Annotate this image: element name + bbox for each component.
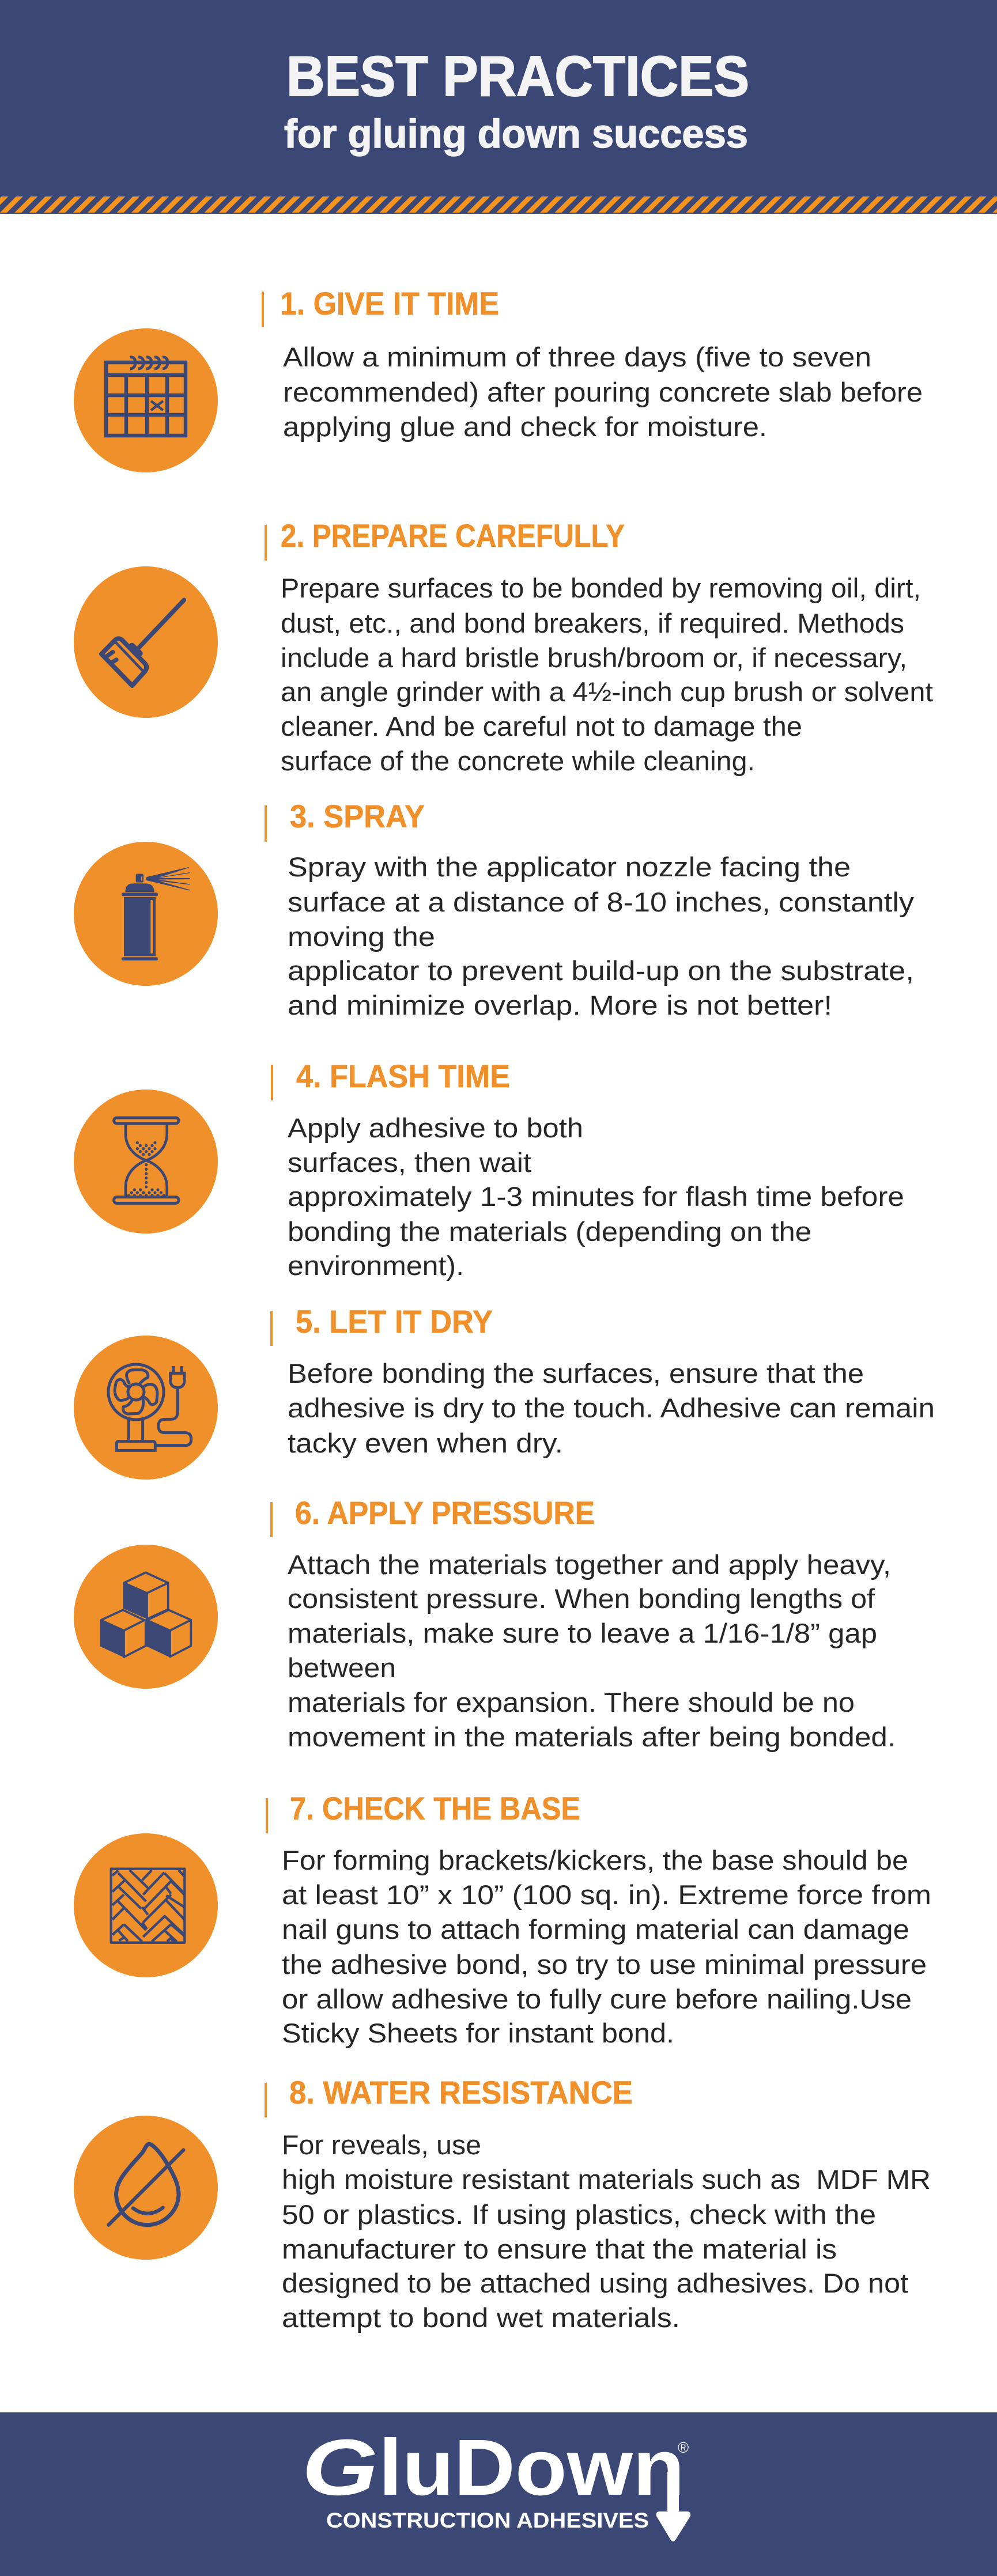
text block: recommended) after pouring concrete slab before <box>283 377 923 407</box>
footer banner <box>0 2412 997 2576</box>
text block: attempt to bond wet materials. <box>282 2302 680 2333</box>
heading: 1. GIVE IT TIME <box>280 285 499 321</box>
text block: the adhesive bond, so try to use minimal pressure <box>282 1949 927 1980</box>
heading: 8. WATER RESISTANCE <box>289 2074 633 2110</box>
icon: electric fan <box>74 1336 218 1480</box>
heading <box>265 798 425 842</box>
text block: surface of the concrete while cleaning. <box>281 746 755 776</box>
heading: 5. LET IT DRY <box>296 1303 493 1340</box>
text block: moving the <box>288 921 435 952</box>
panel: step 5 let it dry <box>74 1303 935 1480</box>
subtitle: for gluing down success <box>284 111 748 156</box>
text block: movement in the materials after being bonded. <box>288 1722 896 1752</box>
text block: manufacturer to ensure that the material is <box>282 2234 837 2264</box>
text block <box>281 573 933 776</box>
text block: For reveals, use <box>282 2129 481 2160</box>
text block: consistent pressure. When bonding lengths of <box>288 1583 875 1614</box>
text block <box>288 852 915 1020</box>
panel: step 3 spray <box>74 798 915 1020</box>
heading: 2. PREPARE CAREFULLY <box>281 517 625 554</box>
text block: applicator to prevent build-up on the substrate, <box>288 955 914 986</box>
title: BEST PRACTICES <box>286 44 749 108</box>
text block: cleaner. And be careful not to damage the <box>281 711 802 742</box>
text block: at least 10” x 10” (100 sq. in). Extreme force from <box>282 1879 931 1910</box>
text block: materials, make sure to leave a 1/16-1/8” gap <box>288 1618 877 1648</box>
text block: tacky even when dry. <box>288 1428 563 1458</box>
icon: brush <box>74 566 218 718</box>
text block: 50 or plastics. If using plastics, check with the <box>282 2199 876 2230</box>
text block: Allow a minimum of three days (five to seven <box>283 342 871 372</box>
text block <box>282 1845 931 2048</box>
text block: applying glue and check for moisture. <box>283 411 767 442</box>
text block: Prepare surfaces to be bonded by removing oil, dirt, <box>281 573 921 603</box>
text block: or allow adhesive to fully cure before nailing.Use <box>282 1984 912 2014</box>
text block <box>288 1358 935 1458</box>
logo: GluDown: luDown <box>379 2423 685 2512</box>
icon: hourglass <box>74 1090 218 1234</box>
text block: an angle grinder with a 4½-inch cup brush or solvent <box>281 676 933 707</box>
icon: no water drop <box>74 2116 218 2260</box>
text block: Attach the materials together and apply heavy, <box>288 1549 891 1580</box>
panel: step 6 apply pressure <box>74 1495 896 1752</box>
logo tagline: CONSTRUCTION ADHESIVES <box>326 2509 649 2532</box>
text block: adhesive is dry to the touch. Adhesive can remain <box>288 1393 935 1423</box>
header banner <box>0 0 997 214</box>
icon: herringbone base <box>74 1833 218 1977</box>
text block: surface at a distance of 8-10 inches, constantly <box>288 887 915 917</box>
text block: For forming brackets/kickers, the base should be <box>282 1845 908 1875</box>
text block <box>288 1113 904 1281</box>
icon: calendar <box>74 328 218 472</box>
heading: 4. FLASH TIME <box>296 1058 510 1094</box>
text block: dust, etc., and bond breakers, if required. Methods <box>281 608 904 638</box>
panel: step 8 water resistance <box>74 2074 931 2333</box>
heading: 3. SPRAY <box>290 798 425 834</box>
text block <box>288 1549 896 1752</box>
text block: approximately 1-3 minutes for flash time before <box>288 1181 904 1212</box>
text block: high moisture resistant materials such as MDF MR <box>282 2164 931 2195</box>
heading: 7. CHECK THE BASE <box>290 1790 580 1826</box>
text block: Before bonding the surfaces, ensure that the <box>288 1358 864 1389</box>
icon: stacked cubes <box>74 1545 218 1689</box>
text block: bonding the materials (depending on the <box>288 1216 811 1247</box>
text block <box>282 2129 931 2333</box>
panel: step 1 give it time <box>74 285 923 472</box>
heading: 6. APPLY PRESSURE <box>295 1495 595 1531</box>
panel: step 4 flash time <box>74 1058 904 1281</box>
text block: include a hard bristle brush/broom or, if necessary, <box>281 642 907 673</box>
text block: Spray with the applicator nozzle facing the <box>288 852 851 882</box>
text block: between <box>288 1652 396 1683</box>
text block: surfaces, then wait <box>288 1147 531 1178</box>
text block: environment). <box>288 1250 464 1281</box>
text block: designed to be attached using adhesives. Do not <box>282 2268 908 2298</box>
panel: step 2 prepare carefully <box>74 517 933 776</box>
text block: and minimize overlap. More is not better! <box>288 990 832 1020</box>
logo: GluDown <box>302 2423 690 2541</box>
text block <box>283 342 923 442</box>
icon: spray can <box>74 842 218 986</box>
logo: GluDown: ® <box>678 2439 689 2456</box>
logo: GluDown: G <box>302 2423 378 2512</box>
text block: materials for expansion. There should be no <box>288 1687 855 1718</box>
text block: Apply adhesive to both <box>288 1113 583 1143</box>
panel: step 7 check the base <box>74 1790 931 2048</box>
text block: Sticky Sheets for instant bond. <box>282 2018 674 2048</box>
text block: nail guns to attach forming material can damage <box>282 1914 909 1945</box>
